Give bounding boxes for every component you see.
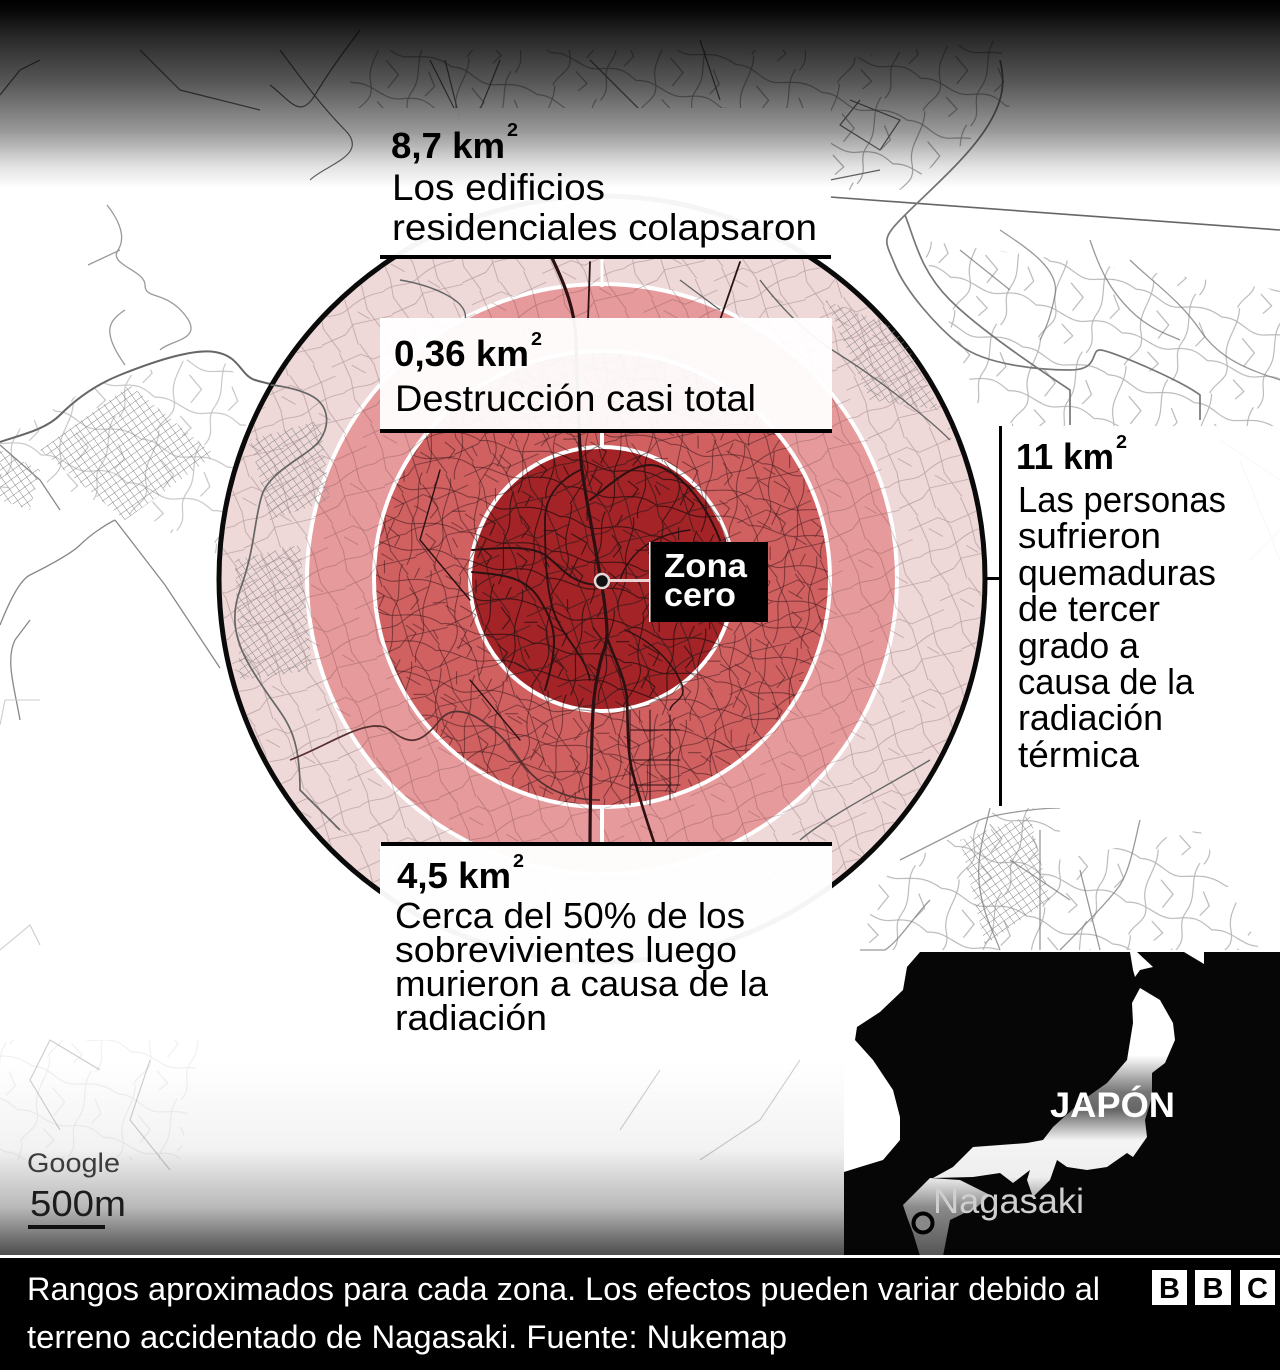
label: 4,5 km2 block: 4,5 km bbox=[397, 855, 511, 896]
label: 11 km2 block: causa de la bbox=[1018, 661, 1195, 702]
west road grids bbox=[215, 280, 950, 840]
north label panel bbox=[380, 108, 831, 258]
inset map of Japan bbox=[844, 952, 1280, 1257]
zone: ring 4.5 km2 bbox=[374, 351, 830, 807]
BBC logo bbox=[1152, 1270, 1275, 1305]
label: 11 km2 block: Las personas bbox=[1018, 479, 1226, 520]
label: 4,5 km2 block bbox=[381, 842, 832, 1038]
label: 11 km2 block: 11 km bbox=[1016, 436, 1114, 477]
BBC logo: C bbox=[1247, 1273, 1268, 1305]
label: 8,7 km2 block: Los edificios bbox=[392, 167, 605, 208]
label: 8,7 km2 block: 8,7 km bbox=[391, 125, 505, 166]
ground zero marker: Zona bbox=[664, 547, 748, 584]
label: 0,36 km2 block bbox=[380, 329, 832, 433]
label: 11 km2 block: 2 bbox=[1116, 432, 1127, 452]
zone: ring 8.7 km2 bbox=[307, 284, 897, 874]
street texture, south-east bbox=[860, 808, 1260, 950]
panel: zone 0.36 km2 bbox=[380, 318, 832, 431]
label: 4,5 km2 block: radiación bbox=[395, 997, 547, 1038]
top dark gradient bbox=[0, 0, 1280, 188]
footer bbox=[0, 1255, 1280, 1370]
label: 8,7 km2 block bbox=[380, 120, 831, 259]
label: 0,36 km2 block: 0,36 km bbox=[394, 333, 529, 374]
label: 4,5 km2 block: murieron a causa de la bbox=[395, 963, 769, 1004]
white ticks between panels and rings bbox=[600, 432, 604, 843]
ground zero marker bbox=[595, 542, 768, 622]
white tick from north panel to ring bbox=[600, 258, 604, 287]
label: 0,36 km2 block: Destrucción casi total bbox=[395, 378, 756, 419]
attribution and scale: 500m bbox=[30, 1183, 126, 1224]
Nagasaki marker bbox=[914, 1214, 932, 1232]
label: 11 km2 block: grado a bbox=[1018, 625, 1140, 666]
attribution and scale bbox=[27, 1148, 126, 1229]
street grid, west edge bbox=[0, 450, 40, 510]
main roads through the centre bbox=[420, 258, 740, 845]
street texture, east bbox=[920, 240, 1280, 430]
street texture, west neighbourhood bbox=[0, 352, 250, 560]
label: 11 km2 block: quemaduras bbox=[1018, 552, 1216, 593]
footer: Rangos aproximados para cada zona. Los efectos pueden variar debido al bbox=[27, 1271, 1100, 1307]
residential street grid, south-east bbox=[960, 815, 1050, 945]
zone: inner circle 0.36 km2 bbox=[470, 447, 734, 711]
residential street grid, west bbox=[40, 385, 215, 520]
label: 11 km2 block: sufrieron bbox=[1018, 515, 1161, 556]
BBC logo: B bbox=[1159, 1273, 1180, 1305]
panel: zone 11 km2 bbox=[1000, 426, 1280, 808]
label: 8,7 km2 block: 2 bbox=[507, 120, 518, 140]
zone: outer ring 11 km2 bbox=[219, 196, 985, 962]
street texture, south-west faint bbox=[0, 1040, 200, 1160]
street texture, top bbox=[350, 50, 830, 108]
inset map of Japan: JAPÓN bbox=[1050, 1085, 1175, 1125]
label: 4,5 km2 block: Cerca del 50% de los bbox=[395, 895, 745, 936]
roads inside zones bbox=[222, 199, 982, 959]
label: 11 km2 block: térmica bbox=[1018, 734, 1140, 775]
label: 11 km2 block bbox=[985, 426, 1226, 806]
ground zero marker: cero bbox=[664, 576, 736, 613]
inset map of Japan: Nagasaki bbox=[933, 1182, 1084, 1221]
street texture, north-east bbox=[830, 40, 1010, 190]
attribution and scale: Google bbox=[27, 1148, 120, 1178]
label: 11 km2 block: radiación bbox=[1018, 697, 1163, 738]
label: 8,7 km2 block: residenciales colapsaron bbox=[392, 207, 817, 248]
label: 4,5 km2 block: sobrevivientes luego bbox=[395, 929, 737, 970]
panel: zone 4.5 km2 bbox=[380, 844, 832, 1049]
BBC logo: B bbox=[1203, 1273, 1223, 1305]
label: 11 km2 block: de tercer bbox=[1018, 588, 1160, 629]
label: 4,5 km2 block: 2 bbox=[513, 851, 524, 871]
label: 0,36 km2 block: 2 bbox=[531, 329, 542, 349]
bottom dark gradient bbox=[0, 1060, 1280, 1257]
footer: terreno accidentado de Nagasaki. Fuente: Nukemap bbox=[27, 1319, 787, 1355]
